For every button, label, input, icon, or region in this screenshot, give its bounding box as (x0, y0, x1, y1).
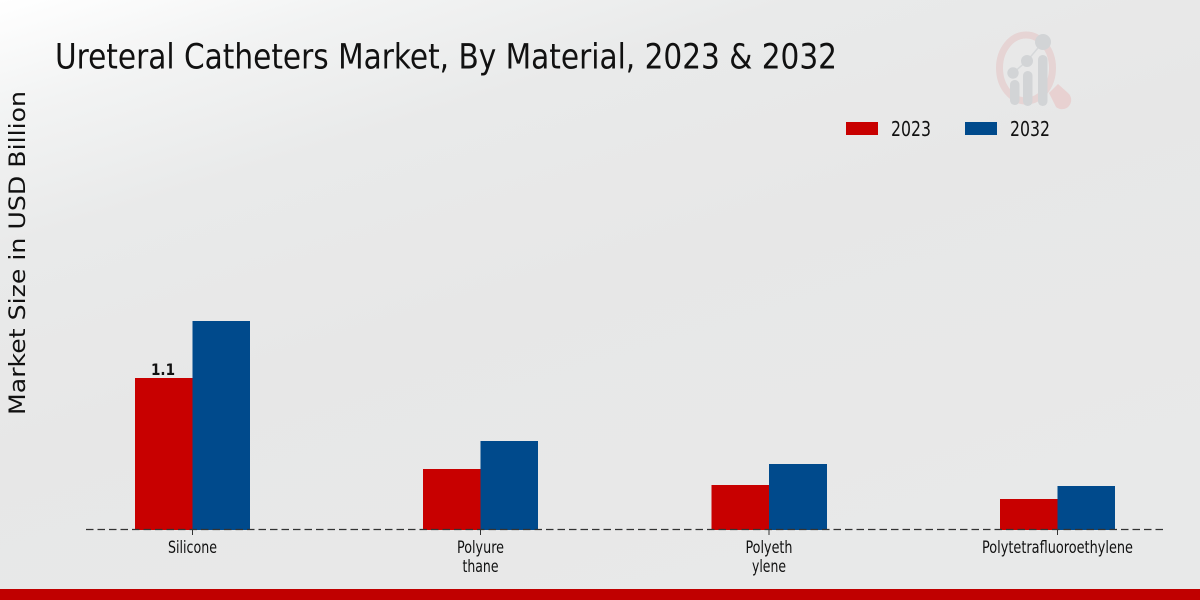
bars: Polytetrafluoroethylene (1000, 486, 1115, 530)
legend: 2023: 2023 (891, 117, 931, 141)
category label: Polyurethane: thane (462, 557, 498, 576)
legend: 2032 (965, 117, 1050, 141)
bars: Polyurethane (423, 441, 538, 530)
data label: 1.1 (151, 360, 175, 379)
y axis label: Market Size in USD Billion (5, 91, 31, 415)
bars: Polyethylene (712, 464, 827, 530)
footer bar (0, 589, 1200, 600)
category label: Polyethylene (746, 538, 792, 576)
category label: Polyethylene: ylene (752, 557, 786, 576)
category label: Silicone: Silicone (168, 538, 217, 557)
title: Ureteral Catheters Market, By Material, 2023 & 2032 (55, 38, 837, 78)
legend: 2023 (846, 117, 931, 141)
icon: watermark logo (1000, 34, 1071, 109)
category label: Polytetrafluoroethylene: Polytetrafluoroethylene (982, 538, 1133, 557)
axis baseline (86, 530, 1164, 535)
bar chart (86, 321, 1164, 576)
bars: Silicone (135, 321, 250, 530)
legend: 2032: 2032 (1010, 117, 1050, 141)
category label: Polyurethane (457, 538, 504, 576)
category label: Polyethylene: Polyeth (746, 538, 792, 557)
category label: Polyurethane: Polyure (457, 538, 504, 557)
legend (846, 117, 1050, 141)
